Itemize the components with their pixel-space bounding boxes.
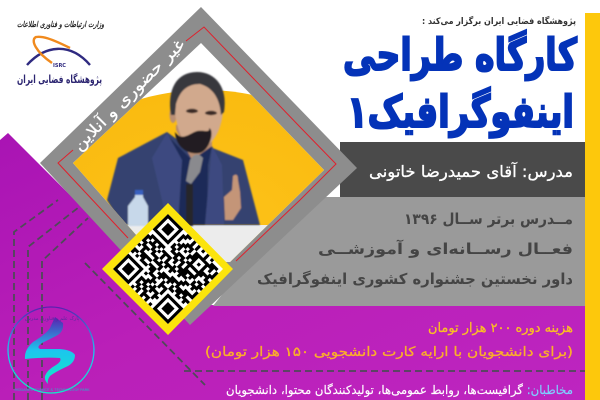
- ISRC mark: ISRC: [53, 63, 66, 69]
- red inner lines: [58, 27, 336, 261]
- audience: مخاطبان: گرافیست‌ها، روابط عمومی‌ها، تولیدکنندگان محتوا، دانشجویان: [226, 383, 573, 398]
- neck: [176, 125, 212, 160]
- ears: [170, 107, 176, 123]
- shirt: [171, 140, 213, 226]
- credential line 3: داور نخستین جشنواره کشوری اینفوگرافیک: [257, 270, 573, 288]
- photo area: [73, 43, 324, 262]
- rotated label: غیر حضوری و آنلاین: [69, 35, 189, 155]
- face: [174, 82, 223, 149]
- credential line 2: فعــال رســانه‌ای و آموزشــی: [318, 240, 573, 258]
- credential line 1: مــدرس برتر ســال ۱۳۹۶: [404, 210, 573, 228]
- organizer line: پژوهشگاه فضایی ایران برگزار می‌کند :: [422, 15, 576, 27]
- table: [128, 225, 268, 262]
- gray credentials panel: [213, 197, 585, 306]
- ring caption top: پارک علم و فناوری مدرس: [25, 315, 80, 322]
- eyes: [186, 109, 198, 113]
- right yellow strip: [585, 13, 600, 400]
- yellow circle backdrop: [73, 90, 324, 262]
- course fee: هزینه دوره ۲۰۰ هزار تومان: [428, 321, 573, 336]
- dashed guide lines: [14, 200, 585, 400]
- science park logo: [8, 307, 94, 393]
- code modules: [113, 214, 223, 324]
- student fee: (برای دانشجویان با ارایه کارت دانشجویی ۱۵۰ هزار تومان): [205, 345, 573, 360]
- ring caption bottom: MODARES SCIENCE & TECHNOLOGY PARK: [14, 388, 90, 392]
- beard: [175, 128, 212, 153]
- white base: [113, 214, 223, 324]
- ministry name: وزارت ارتباطات و فناوری اطلاعات: [17, 20, 104, 30]
- yellow frame: [102, 203, 233, 335]
- gray diamond frame: [40, 7, 357, 325]
- ministry and ISRC logo: [17, 20, 104, 86]
- instructor name: مدرس: آقای حمیدرضا خاتونی: [369, 162, 573, 182]
- presenter photo: [107, 72, 260, 226]
- purple background panel: [0, 133, 585, 400]
- lapels: [152, 134, 182, 214]
- dark instructor bar: [340, 142, 585, 198]
- ring: [8, 307, 94, 393]
- swoosh: [25, 317, 75, 384]
- hair: [170, 72, 225, 115]
- microphone: [186, 154, 203, 184]
- orbit emblem: [27, 37, 90, 65]
- QR code: [102, 203, 233, 335]
- institute name: پژوهشگاه فضایی ایران: [17, 73, 102, 86]
- jacket: [107, 132, 260, 225]
- hand: [224, 175, 241, 220]
- water bottle: [128, 190, 148, 226]
